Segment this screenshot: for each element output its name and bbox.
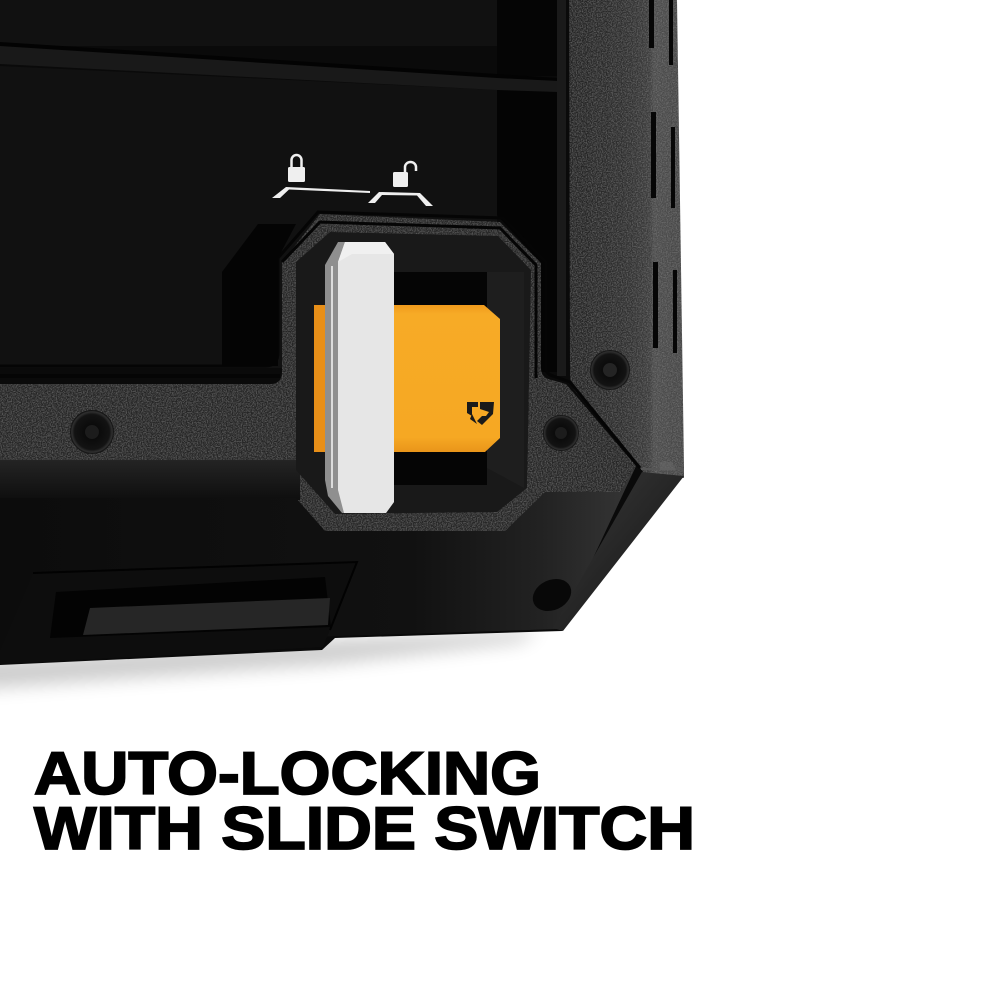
headline line 2: WITH SLIDE SWITCH (34, 795, 695, 862)
shelf ledge (0, 44, 558, 92)
white slide switch (325, 242, 394, 513)
side panel (569, 0, 684, 478)
screw left (70, 410, 114, 454)
screw side panel (590, 350, 630, 390)
screw centre right (543, 415, 579, 451)
headline line 1: AUTO-LOCKING (34, 740, 541, 807)
headline (34, 740, 695, 862)
carry handle (0, 562, 357, 664)
ground shadow (0, 630, 540, 690)
lower right corner facet (553, 472, 684, 631)
toughbuilt logo (467, 402, 494, 425)
lock indicator icons (272, 155, 433, 206)
icon: unlocked padlock (393, 162, 416, 187)
icon: locked padlock (288, 155, 305, 182)
unlocked position bracket (368, 192, 433, 206)
side panel slots (649, 0, 677, 353)
front panel (0, 212, 640, 655)
screw lower corner (528, 573, 576, 617)
toolbox case (0, 0, 684, 665)
case interior (0, 0, 684, 665)
screws (70, 350, 630, 617)
locked position bracket (272, 187, 370, 198)
lower dark band (0, 466, 636, 655)
front panel fade (0, 460, 300, 500)
orange slide latch (314, 305, 500, 452)
inner vertical rail (557, 0, 566, 376)
switch recess (296, 232, 531, 514)
